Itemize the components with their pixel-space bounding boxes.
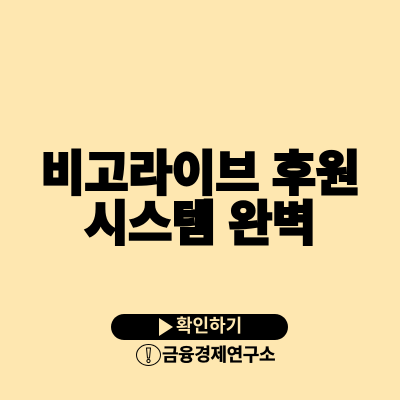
title: [41, 148, 359, 251]
icon: exclamation circle: [136, 344, 161, 366]
icon: play triangle: [159, 318, 173, 336]
title line 2: 시스템 완벽: [84, 198, 316, 251]
button label: 확인하기: [176, 316, 242, 336]
title line 1: 비고라이브 후원: [41, 148, 359, 201]
brand: [136, 344, 275, 366]
button: confirm: [111, 314, 288, 340]
brand name: 금융경제연구소: [162, 345, 275, 365]
